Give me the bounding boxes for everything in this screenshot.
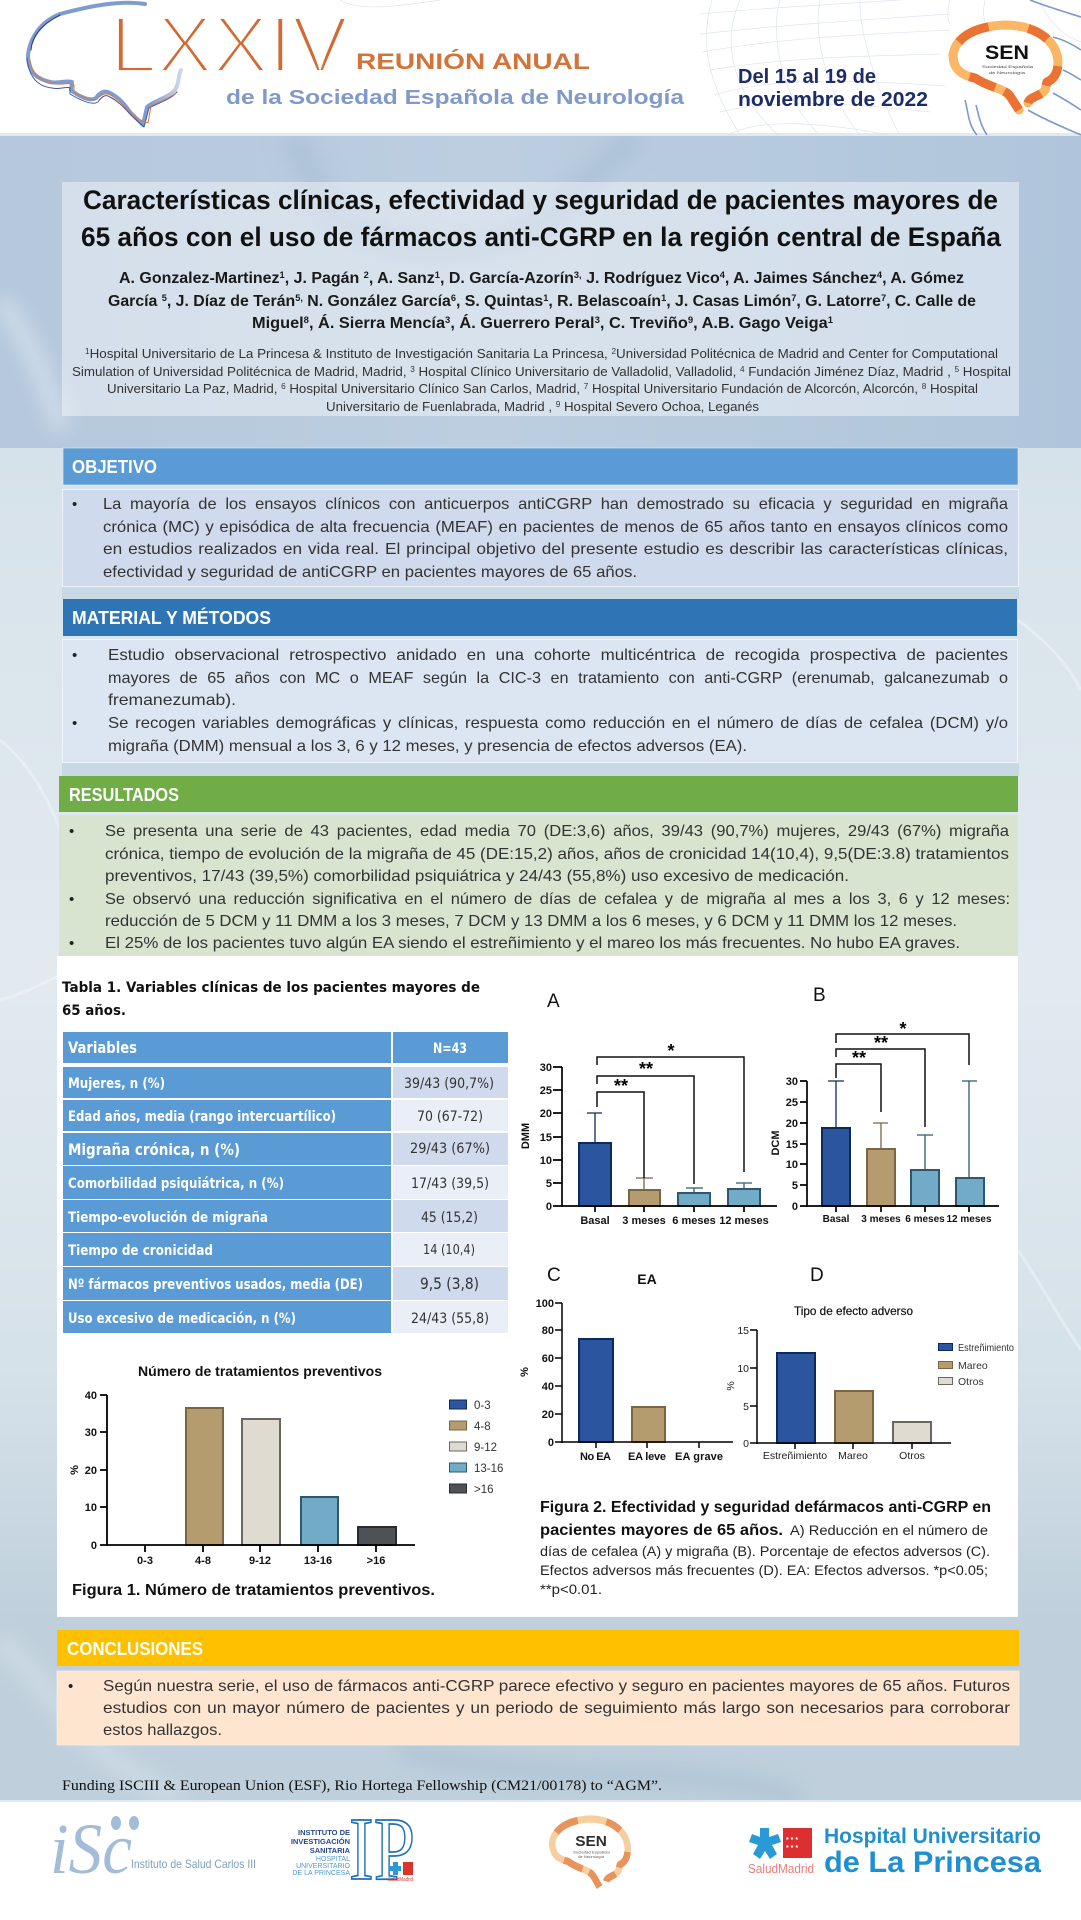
- chart B: DCM: 20: [786, 1118, 798, 1130]
- text: material body: migraña (DMM) mensual a los 3, 6 y 12 meses, y presencia de efectos adversos (EA).: [108, 738, 747, 755]
- logo: SEN footer: Sociedad Española: [573, 1850, 610, 1854]
- caption: figura 2: días de cefalea (A) y migraña (B). Porcentaje de efectos adversos (C).: [540, 1544, 990, 1559]
- chart C: EA: 40: [542, 1381, 554, 1393]
- chart B: DCM: **: [852, 1048, 866, 1068]
- chart: número de tratamientos preventivos: 40: [85, 1390, 97, 1402]
- chart: número de tratamientos preventivos: 0-3: [137, 1555, 153, 1567]
- table: clinical variables: Migraña crónica, n (%): [68, 1140, 240, 1159]
- chart B: DCM: 10: [786, 1159, 798, 1171]
- chart D: tipo de efecto adverso: Otros: [899, 1450, 925, 1462]
- chart A: DMM: 6 meses: [672, 1215, 716, 1227]
- chart A: DMM: *: [667, 1041, 675, 1061]
- chart A: DMM: Basal: [580, 1215, 610, 1227]
- chart D: tipo de efecto adverso: 5: [743, 1401, 749, 1413]
- logo: Instituto de Salud Carlos III: Instituto de Salud Carlos III: [131, 1857, 256, 1871]
- chart D: tipo de efecto adverso: 10: [737, 1363, 749, 1375]
- table: clinical variables: Nº fármacos preventivos usados, media (DE): [68, 1277, 363, 1293]
- chart A: DMM: [520, 991, 777, 1227]
- chart D: tipo de efecto adverso: 15: [737, 1325, 749, 1337]
- chart: número de tratamientos preventivos: 13-16: [304, 1555, 332, 1567]
- icon: SEN logo header: Sociedad Española: [982, 64, 1034, 69]
- legend: 4-8: [474, 1421, 491, 1433]
- affiliations: [72, 346, 1011, 414]
- heading: conclusiones: CONCLUSIONES: [67, 1639, 203, 1659]
- chart B: DCM: 25: [786, 1097, 798, 1109]
- legend: Estreñimiento: [958, 1342, 1014, 1354]
- table: clinical variables: 24/43 (55,8): [411, 1311, 489, 1327]
- text: resultados body: Se observó una reducción significativa en el número de días de cefalea y de migraña al mes a los 3, 6 y 12 meses:: [105, 891, 1010, 908]
- chart C: EA: %: [519, 1367, 531, 1377]
- chart D: tipo de efecto adverso: Mareo: [838, 1450, 868, 1462]
- table: clinical variables: 39/43 (90,7%): [404, 1076, 494, 1092]
- text: material body: •: [72, 715, 77, 732]
- authors: Miguel 8, Á. Sierra Mencía 3, Á. Guerrero Peral 3, C. Treviño 9, A.B. Gago Veiga 1: [252, 315, 833, 332]
- text: resultados body: preventivos, 17/43 (39,5%) comorbilidad psiquiátrica y 24/43 (55,8%) uso excesivo de medicación.: [105, 868, 849, 885]
- text: material body: [72, 647, 1008, 755]
- caption: figura 2: Figura 2. Efectividad y seguridad defármacos anti-CGRP en: [540, 1499, 991, 1516]
- logo: Hospital Universitario de La Princesa: de La Princesa: [824, 1846, 1041, 1879]
- affiliations: Simulation of Universidad Politécnica de Madrid, Madrid, 3 Hospital Clínico Universitario de Valladolid, Valladolid, 4 Fundación Jiménez Díaz, Madrid , 5 Hospital: [72, 364, 1011, 379]
- legend: [450, 1400, 503, 1496]
- authors: A. Gonzalez-Martinez 1, J. Pagán 2, A. Sanz1, D. García-Azorín 3, J. Rodríguez Vico 4, A. Jaimes Sánchez 4, A. Gómez: [119, 270, 964, 287]
- chart D: tipo de efecto adverso: %: [725, 1381, 737, 1391]
- legend: Mareo: [958, 1360, 988, 1372]
- text: funding: Funding ISCIII & European Union (ESF), Rio Hortega Fellowship (CM21/00178) to “AGM”.: [62, 1778, 662, 1794]
- chart C: EA: EA leve: [628, 1451, 666, 1463]
- logo: SEN footer: [552, 1819, 628, 1887]
- chart B: DCM: 5: [792, 1180, 798, 1192]
- logo: Instituto de Salud Carlos III: [50, 1809, 256, 1889]
- chart: número de tratamientos preventivos: 4-8: [195, 1555, 211, 1567]
- text: conclusiones body: [68, 1678, 1011, 1739]
- legend: >16: [474, 1484, 494, 1496]
- text: dates: Del 15 al 19 de: [738, 66, 876, 88]
- header band: [0, 0, 1081, 136]
- chart C: EA: EA: [637, 1271, 657, 1287]
- table: clinical variables: 70 (67-72): [417, 1109, 483, 1125]
- panel: white figures area: [57, 956, 1018, 1617]
- chart A: DMM: A: [547, 991, 560, 1012]
- chart A: DMM: 12 meses: [719, 1215, 769, 1227]
- heading: objetivo: OBJETIVO: [72, 457, 157, 477]
- legend: 9-12: [474, 1442, 497, 1454]
- legend: [938, 1342, 1014, 1388]
- caption: figura 2: Efectos adversos más frecuentes (D). EA: Efectos adversos. *p<0.05;: [540, 1563, 988, 1578]
- authors: [108, 270, 976, 332]
- footer band: [0, 1800, 1081, 1920]
- chart B: DCM: 15: [786, 1139, 798, 1151]
- logo: Instituto de Investigación Sanitaria La Princesa: DE LA PRINCESA: [292, 1870, 350, 1877]
- chart A: DMM: 10: [540, 1155, 552, 1167]
- title: [81, 185, 1002, 252]
- panel: conclusiones: [57, 1630, 1019, 1745]
- table: clinical variables: Tiempo de cronicidad: [68, 1243, 213, 1259]
- chart: número de tratamientos preventivos: >16: [367, 1555, 385, 1567]
- panel: title block: [62, 182, 1019, 416]
- panel: material y métodos: [62, 599, 1018, 762]
- logo: Hospital Universitario de La Princesa: * * *: [786, 1837, 798, 1844]
- text: material body: Estudio observacional retrospectivo anidado en una cohorte multicéntrica de recogida prospectiva de pacientes: [108, 647, 1008, 664]
- table: clinical variables: Edad años, media (rango intercuartílico): [68, 1109, 336, 1125]
- text: conclusiones body: estudios con un mayor número de pacientes y un periodo de seguimiento más largo son necesarios para corroborar: [103, 1700, 1011, 1717]
- logo: Instituto de Investigación Sanitaria La Princesa: HOSPITAL: [316, 1856, 350, 1863]
- chart C: EA: No EA: [580, 1451, 611, 1463]
- text: objetivo body: efectividad y seguridad de antiCGRP en pacientes mayores de 65 años.: [103, 564, 637, 581]
- chart B: DCM: 0: [792, 1201, 798, 1213]
- chart B: DCM: **: [874, 1033, 888, 1053]
- chart C: EA: 60: [542, 1353, 554, 1365]
- logo: Hospital Universitario de La Princesa: SaludMadrid: [748, 1861, 814, 1876]
- text: resultados body: •: [69, 891, 74, 908]
- chart: número de tratamientos preventivos: [69, 1363, 503, 1567]
- text: resultados body: crónica, tiempo de evolución de la migraña de 45 (DE:15,2) años, años de cronicidad 14(10,4), 9,5(DE:3.8) tratamientos: [105, 846, 1009, 863]
- text: dates: [738, 66, 928, 111]
- chart A: DMM: **: [614, 1076, 628, 1096]
- chart: número de tratamientos preventivos: 0: [91, 1540, 97, 1552]
- heading: tabla 1: Tabla 1. Variables clínicas de los pacientes mayores de: [62, 980, 480, 996]
- table: clinical variables: Uso excesivo de medicación, n (%): [68, 1311, 296, 1327]
- chart B: DCM: DCM: [770, 1130, 782, 1156]
- chart A: DMM: **: [639, 1059, 653, 1079]
- text: material body: fremanezumab).: [108, 692, 236, 709]
- chart B: DCM: 30: [786, 1076, 798, 1088]
- chart B: DCM: [770, 985, 999, 1225]
- table: clinical variables: Mujeres, n (%): [68, 1076, 165, 1092]
- chart B: DCM: B: [813, 985, 826, 1006]
- text: material body: •: [72, 647, 77, 664]
- chart B: DCM: 12 meses: [946, 1214, 992, 1225]
- icon: SEN logo header: [953, 25, 1058, 110]
- chart C: EA: 0: [548, 1437, 554, 1449]
- text: objetivo body: en estudios realizados en vida real. El principal objetivo del presente estudio es describir las características clínicas,: [103, 541, 1008, 558]
- heading: Reunión anual: REUNIÓN ANUAL: [356, 49, 590, 74]
- title: Características clínicas, efectividad y seguridad de pacientes mayores de: [83, 185, 998, 215]
- affiliations: Universitario de Fuenlabrada, Madrid , 9 Hospital Severo Ochoa, Leganés: [326, 399, 760, 414]
- caption: figura 2: [540, 1499, 991, 1597]
- logo: SEN footer: SEN: [575, 1834, 607, 1850]
- chart D: tipo de efecto adverso: Tipo de efecto adverso: [794, 1304, 913, 1318]
- icon: brain outline: [27, 3, 181, 127]
- chart A: DMM: 15: [540, 1132, 552, 1144]
- table: clinical variables: Variables: [68, 1038, 137, 1057]
- heading: tabla 1: 65 años.: [62, 1003, 126, 1019]
- heading: Sociedad Española de Neurología: de la Sociedad Española de Neurología: [226, 87, 685, 109]
- caption: figura 2: A) Reducción en el número de: [790, 1523, 988, 1538]
- text: objetivo body: •: [72, 496, 77, 513]
- chart A: DMM: 0: [546, 1201, 552, 1213]
- text: conclusiones body: Según nuestra serie, el uso de fármacos anti-CGRP parece efectivo y seguro en pacientes mayores de 65 años. Futuros: [103, 1678, 1010, 1695]
- heading: resultados: RESULTADOS: [69, 785, 179, 805]
- chart D: tipo de efecto adverso: [725, 1265, 1014, 1462]
- logo: SEN footer: de Neurología: [578, 1855, 604, 1859]
- affiliations: Universitario La Paz, Madrid, 6 Hospital Universitario Clínico San Carlos, Madrid, 7 Hospital Universitario Fundación de Alcorcón, Alcorcón, 8 Hospital: [107, 381, 978, 396]
- significance brackets: [836, 1034, 969, 1127]
- heading: tabla 1: [62, 980, 480, 1019]
- text: resultados body: reducción de 5 DCM y 11 DMM a los 3 meses, 7 DCM y 13 DMM a los 6 meses, y 6 DCM y 11 DMM los 12 meses.: [105, 913, 957, 930]
- chart A: DMM: 3 meses: [622, 1215, 666, 1227]
- chart C: EA: 80: [542, 1325, 554, 1337]
- chart C: EA: EA grave: [675, 1451, 723, 1463]
- text: objetivo body: crónica (MC) y episódica de alta frecuencia (MEAF) en pacientes de menos de 65 años tanto en ensayos clínicos como: [103, 519, 1008, 536]
- chart B: DCM: Basal: [823, 1214, 850, 1225]
- chart C: EA: 20: [542, 1409, 554, 1421]
- chart: número de tratamientos preventivos: 30: [85, 1427, 97, 1439]
- chart D: tipo de efecto adverso: Estreñimiento: [763, 1450, 827, 1462]
- affiliations: 1Hospital Universitario de La Princesa & Instituto de Investigación Sanitaria La Princesa, 2Universidad Politécnica de Madrid and Center for Computational: [85, 346, 998, 361]
- chart: número de tratamientos preventivos: 10: [85, 1502, 97, 1514]
- chart B: DCM: *: [899, 1019, 907, 1039]
- caption: figura 2: pacientes mayores de 65 años.: [540, 1522, 783, 1539]
- table: clinical variables: N=43: [433, 1041, 467, 1057]
- chart C: EA: 100: [536, 1298, 554, 1310]
- logo: Instituto de Investigación Sanitaria La Princesa: IP: [349, 1800, 415, 1899]
- title: LXXIV: LXXIV: [110, 0, 349, 89]
- logo: Instituto de Investigación Sanitaria La Princesa: SaludMadrid: [388, 1877, 413, 1883]
- logo: Instituto de Salud Carlos III: iSc: [50, 1809, 132, 1889]
- text: resultados body: [69, 823, 1010, 952]
- logo: Instituto de Investigación Sanitaria La Princesa: UNIVERSITARIO: [296, 1863, 351, 1870]
- chart A: DMM: DMM: [520, 1123, 532, 1149]
- table: clinical variables: 14 (10,4): [423, 1243, 475, 1258]
- legend: Otros: [958, 1376, 984, 1388]
- chart: número de tratamientos preventivos: 9-12: [249, 1555, 271, 1567]
- text: material body: mayores de 65 años con MC o MEAF según la CIC-3 en tratamiento con anti-CGRP (erenumab, galcanezumab o: [108, 670, 1008, 687]
- icon: SEN logo header: de Neurología: [989, 70, 1026, 75]
- panel: resultados: [59, 776, 1018, 956]
- text: dates: noviembre de 2022: [738, 89, 928, 111]
- title: 65 años con el uso de fármacos anti-CGRP en la región central de España: [81, 222, 1002, 252]
- table: clinical variables: [63, 1032, 508, 1333]
- logo: Instituto de Investigación Sanitaria La Princesa: SANITARIA: [310, 1846, 351, 1855]
- table: clinical variables: 17/43 (39,5): [411, 1176, 489, 1192]
- chart: número de tratamientos preventivos: %: [69, 1465, 81, 1475]
- chart C: EA: [519, 1265, 733, 1463]
- chart A: DMM: 20: [540, 1108, 552, 1120]
- legend: 0-3: [474, 1400, 491, 1412]
- text: resultados body: •: [69, 823, 74, 840]
- table: clinical variables: 9,5 (3,8): [420, 1274, 479, 1293]
- icon: SEN logo header: SEN: [985, 43, 1029, 64]
- table: clinical variables: Tiempo-evolución de migraña: [68, 1210, 268, 1226]
- legend: 13-16: [474, 1463, 503, 1475]
- heading: material y métodos: MATERIAL Y MÉTODOS: [72, 607, 271, 628]
- bars: [186, 1408, 396, 1545]
- chart A: DMM: 25: [540, 1085, 552, 1097]
- text: resultados body: Se presenta una serie de 43 pacientes, edad media 70 (DE:3,6) años, 39/43 (90,7%) mujeres, 29/43 (67%) migraña: [105, 823, 1009, 840]
- logo: Hospital Universitario de La Princesa: Hospital Universitario: [824, 1825, 1041, 1848]
- chart B: DCM: 6 meses: [905, 1214, 945, 1225]
- logo: Instituto de Investigación Sanitaria La Princesa: INSTITUTO DE: [298, 1828, 350, 1837]
- panel: objetivo: [62, 448, 1018, 586]
- chart A: DMM: 30: [540, 1062, 552, 1074]
- caption: figura 2: **p<0.01.: [540, 1582, 602, 1597]
- logo: Hospital Universitario de La Princesa: * * *: [786, 1845, 798, 1852]
- chart A: DMM: 5: [546, 1178, 552, 1190]
- logo: Instituto de Investigación Sanitaria La Princesa: INVESTIGACIÓN: [291, 1837, 350, 1846]
- authors: García 5, J. Díaz de Terán 5, N. González García 6, S. Quintas1, R. Belascoaín 1, J. Casas Limón 7, G. Latorre7, C. Calle de: [108, 293, 976, 310]
- table: clinical variables: 45 (15,2): [421, 1210, 478, 1226]
- chart D: tipo de efecto adverso: D: [810, 1265, 824, 1286]
- text: material body: Se recogen variables demográficas y clínicas, respuesta como reducción en el número de días de cefalea (DCM) y/o: [108, 715, 1008, 732]
- chart C: EA: C: [547, 1265, 561, 1286]
- significance brackets: [597, 1057, 744, 1184]
- table: clinical variables: Comorbilidad psiquiátrica, n (%): [68, 1176, 284, 1192]
- table: clinical variables: 29/43 (67%): [410, 1141, 490, 1157]
- text: conclusiones body: •: [68, 1678, 73, 1695]
- chart: número de tratamientos preventivos: 20: [85, 1465, 97, 1477]
- logo: Hospital Universitario de La Princesa: [748, 1825, 1041, 1879]
- text: resultados body: El 25% de los pacientes tuvo algún EA siendo el estreñimiento y el mareo los más frecuentes. No hubo EA graves.: [105, 935, 960, 952]
- text: conclusiones body: estos hallazgos.: [103, 1722, 222, 1739]
- chart: número de tratamientos preventivos: Número de tratamientos preventivos: [138, 1363, 382, 1379]
- chart B: DCM: 3 meses: [861, 1214, 901, 1225]
- caption: figura 1: Figura 1. Número de tratamientos preventivos.: [72, 1582, 435, 1599]
- text: objetivo body: La mayoría de los ensayos clínicos con anticuerpos antiCGRP han demostrado su eficacia y seguridad en migraña: [103, 496, 1008, 513]
- chart D: tipo de efecto adverso: 0: [743, 1438, 749, 1450]
- text: resultados body: •: [69, 935, 74, 952]
- logo: Instituto de Investigación Sanitaria La Princesa: [291, 1800, 415, 1899]
- text: objetivo body: [72, 496, 1008, 581]
